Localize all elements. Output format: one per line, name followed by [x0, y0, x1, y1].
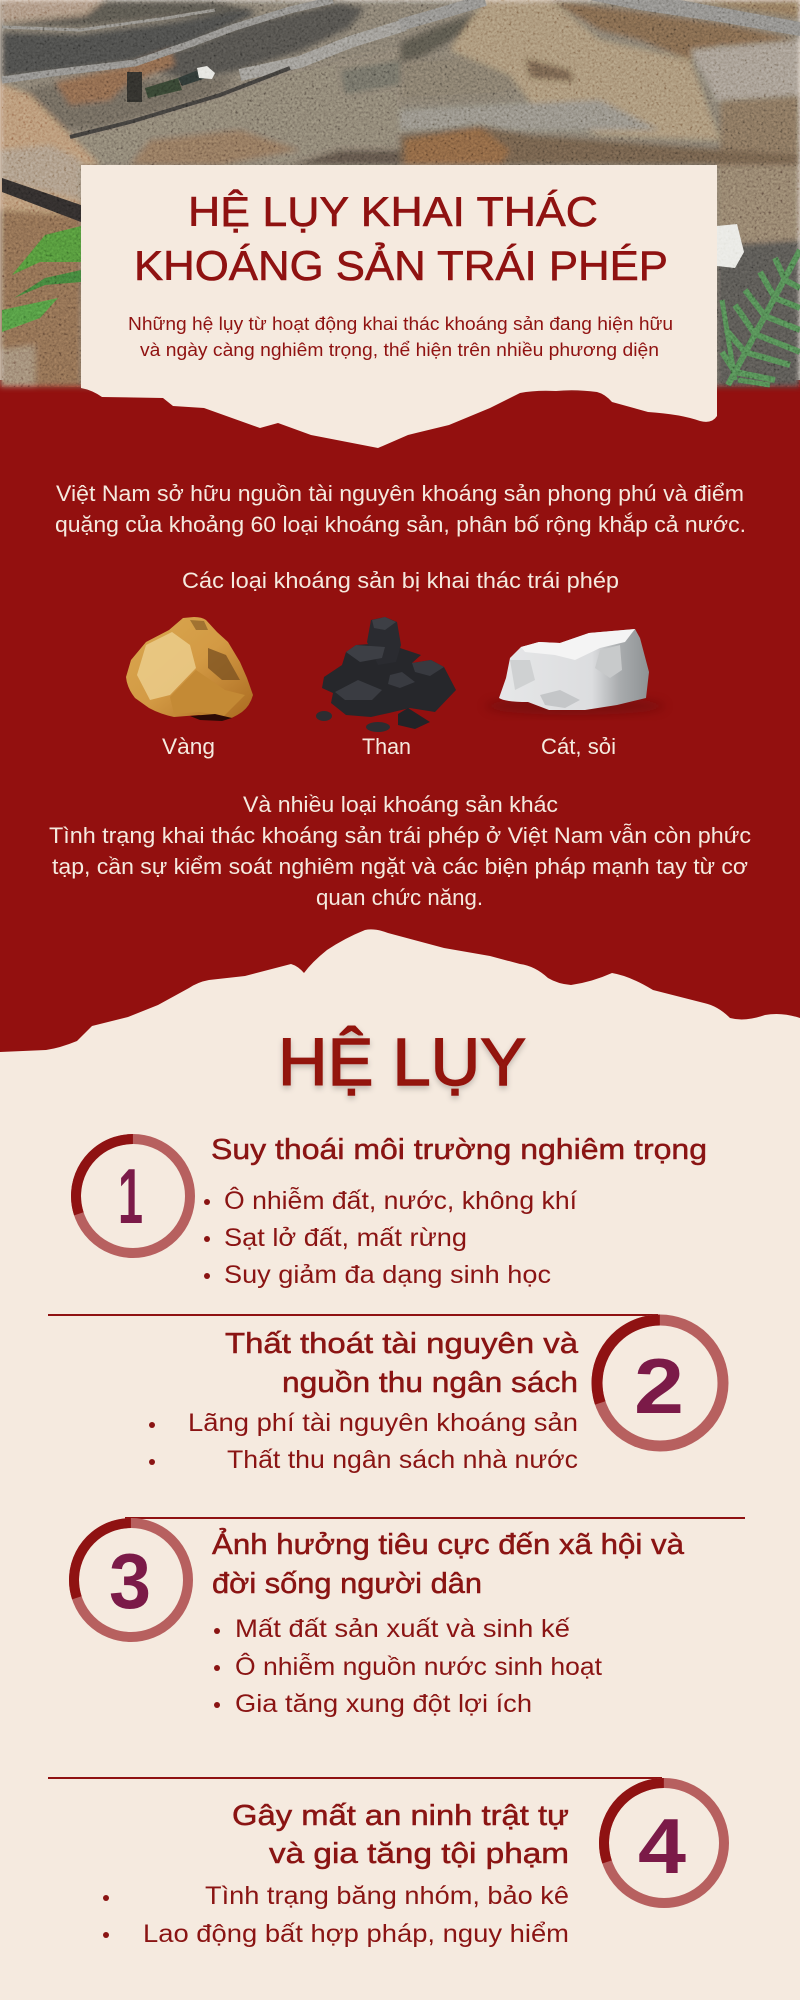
closing text: Và nhiều loại khoáng sản khác	[243, 792, 558, 817]
heading 1: Suy thoái môi trường nghiêm trọng	[211, 1134, 707, 1166]
closing text	[49, 792, 751, 910]
panel: consequence 2	[149, 1304, 739, 1474]
mineral labels: Vàng	[162, 734, 215, 759]
red band with mountain-shaped lower edge	[0, 380, 800, 1052]
panel: consequence 4	[103, 1767, 740, 1948]
heading 4: Gây mất an ninh trật tự	[232, 1800, 569, 1832]
section heading: HỆ LỤY	[278, 1025, 526, 1100]
bullet list 4	[103, 1882, 569, 1948]
icon: log and green leaves	[2, 178, 81, 332]
title: HỆ LỤY KHAI THÁC	[188, 188, 598, 235]
bullet list 1: Suy giảm đa dạng sinh học	[224, 1261, 551, 1289]
number ring 4	[588, 1767, 740, 1919]
icon: gold nugget	[126, 617, 253, 721]
number ring 1	[61, 1124, 205, 1268]
closing text: tạp, cần sự kiểm soát nghiêm ngặt và các biện pháp mạnh tay từ cơ	[52, 854, 748, 879]
bullet list 3: Gia tăng xung đột lợi ích	[235, 1690, 532, 1718]
photo: open-pit mine	[0, 0, 800, 387]
mineral labels: Than	[362, 734, 411, 759]
icon: white stone	[485, 629, 665, 715]
bullet list 1: Ô nhiễm đất, nước, không khí	[224, 1186, 577, 1215]
subtitle: và ngày càng nghiêm trọng, thể hiện trên nhiều phương diện	[140, 340, 659, 360]
icon: coal pile	[316, 617, 456, 732]
heading 3	[212, 1527, 685, 1600]
bullet list 1: Sạt lở đất, mất rừng	[224, 1224, 467, 1252]
heading 2: Thất thoát tài nguyên và	[225, 1328, 579, 1360]
panel: consequence 1	[61, 1124, 707, 1289]
subtitle	[128, 314, 673, 360]
intro text: Việt Nam sở hữu nguồn tài nguyên khoáng sản phong phú và điểm	[56, 481, 744, 506]
bullet list 3: Mất đất sản xuất và sinh kế	[235, 1615, 570, 1643]
icon: fern	[722, 250, 800, 385]
heading 3: Ảnh hưởng tiêu cực đến xã hội và	[212, 1527, 685, 1561]
heading 2	[225, 1328, 579, 1399]
bullet list 4: Lao động bất hợp pháp, nguy hiểm	[143, 1920, 569, 1948]
title: KHOÁNG SẢN TRÁI PHÉP	[134, 241, 668, 289]
minerals subheading: Các loại khoáng sản bị khai thác trái phép	[182, 568, 619, 593]
number ring 2	[581, 1304, 739, 1462]
number ring 3: 3	[109, 1537, 151, 1625]
number ring 1: 1	[118, 1152, 143, 1240]
bullet list 2: Thất thu ngân sách nhà nước	[227, 1446, 578, 1474]
bullet list 4: Tình trạng băng nhóm, bảo kê	[205, 1882, 569, 1910]
subtitle: Những hệ lụy từ hoạt động khai thác khoáng sản đang hiện hữu	[128, 314, 673, 334]
closing text: Tình trạng khai thác khoáng sản trái phép ở Việt Nam vẫn còn phức	[49, 823, 751, 848]
heading 2: nguồn thu ngân sách	[282, 1367, 578, 1399]
number ring 3	[59, 1508, 203, 1652]
icon: truck and excavator	[127, 66, 744, 268]
heading 3: đời sống người dân	[212, 1568, 482, 1600]
bullet list 1	[204, 1186, 577, 1289]
bullet list 2: Lãng phí tài nguyên khoáng sản	[188, 1409, 578, 1437]
title	[134, 188, 668, 289]
heading 4: và gia tăng tội phạm	[269, 1838, 569, 1870]
intro text	[55, 481, 746, 537]
closing text: quan chức năng.	[316, 885, 483, 910]
mineral labels	[162, 734, 616, 759]
number ring 2: 2	[634, 1342, 684, 1430]
mineral labels: Cát, sỏi	[541, 734, 616, 759]
bullet list 3: Ô nhiễm nguồn nước sinh hoạt	[235, 1652, 602, 1681]
intro text: quặng của khoảng 60 loại khoáng sản, phân bố rộng khắp cả nước.	[55, 512, 746, 537]
bullet list 2	[149, 1409, 578, 1474]
bullet list 3	[214, 1615, 602, 1718]
number ring 4: 4	[638, 1802, 686, 1890]
heading 4	[232, 1800, 569, 1870]
panel: title card with torn bottom edge	[81, 165, 717, 448]
panel: consequence 3	[59, 1508, 685, 1718]
